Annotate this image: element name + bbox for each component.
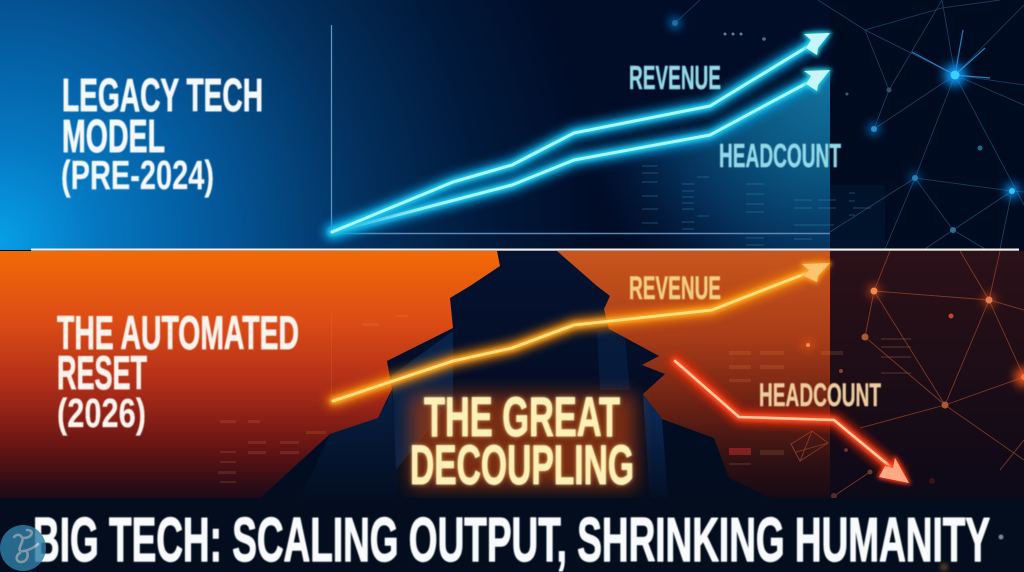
logo badge — [0, 525, 46, 571]
panel: legacy tech model — [0, 0, 1024, 250]
heading: the automated reset — [57, 306, 299, 436]
faint data bars — [218, 312, 911, 483]
callout: the great decoupling: DECOUPLING — [410, 433, 634, 496]
panel: the automated reset — [0, 251, 1024, 500]
heading: the automated reset: (2026) — [57, 390, 146, 436]
heading: the automated reset: RESET — [57, 346, 147, 399]
line: revenue rising orange — [333, 263, 830, 401]
jacket highlight right — [643, 394, 668, 500]
heading: legacy tech model: LEGACY TECH — [62, 69, 263, 121]
label: revenue top: REVENUE — [629, 59, 721, 96]
silhouette: executive figure — [258, 251, 774, 500]
label: revenue bottom: REVENUE — [629, 270, 721, 306]
label: headcount bottom: HEADCOUNT — [759, 377, 881, 413]
heading: legacy tech model: MODEL — [62, 110, 165, 162]
callout: the great decoupling: THE GREAT — [424, 385, 620, 448]
heading: legacy tech model — [61, 69, 263, 198]
network: blue nodes — [670, 0, 1024, 249]
callout: the great decoupling: DECOUPLING — [410, 433, 634, 496]
jacket highlight left — [392, 331, 453, 470]
chart area glow — [520, 70, 830, 249]
heading: legacy tech model: (PRE-2024) — [61, 152, 214, 198]
network: orange nodes — [791, 251, 1024, 499]
label: headcount top: HEADCOUNT — [719, 137, 841, 174]
chart axes — [331, 25, 830, 234]
line: revenue rising — [332, 33, 830, 232]
line: headcount falling red — [675, 361, 909, 483]
faint data table — [642, 165, 871, 246]
footer band — [0, 498, 1024, 572]
heading: the automated reset: THE AUTOMATED — [57, 306, 299, 359]
callout: the great decoupling: THE GREAT — [424, 385, 620, 448]
divider — [31, 248, 1019, 251]
line: headcount rising — [332, 70, 830, 232]
callout: the great decoupling — [410, 385, 636, 496]
